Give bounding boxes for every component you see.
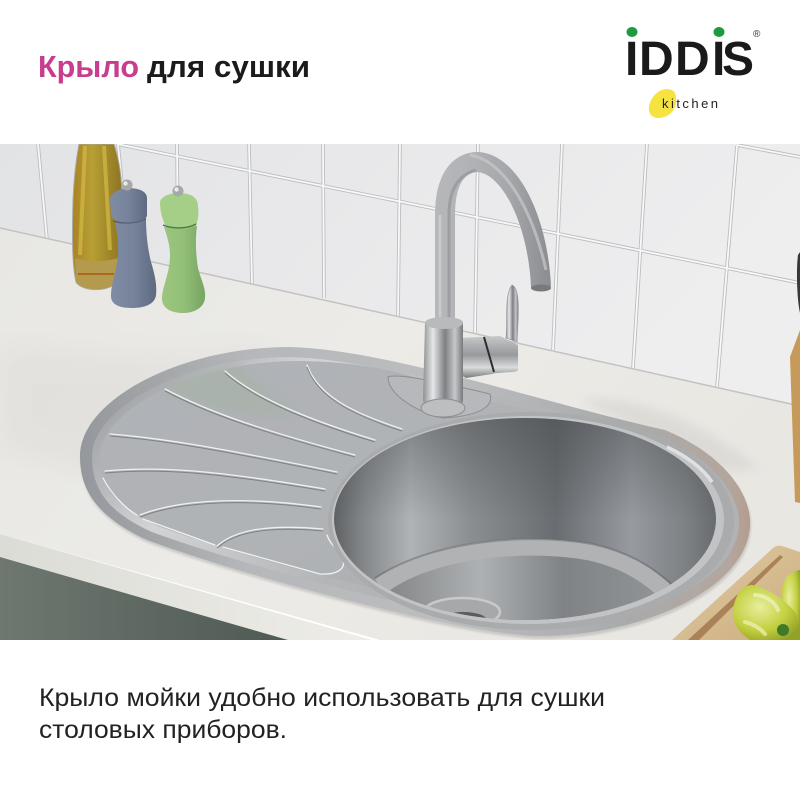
cutting board with peppers [672,546,800,640]
sink [80,347,752,640]
logo: IDDIS kitchen [625,27,761,118]
body text [39,684,605,744]
bowl [328,412,724,630]
yellow blob [649,89,676,118]
tiled wall [0,144,800,414]
logo wordmark: IDDIS [625,33,754,86]
cabinet below counter [0,557,288,640]
blue pepper mill [110,180,156,308]
bowl rim ring [328,412,734,630]
wooden block at right edge [790,252,800,503]
countertop [0,228,800,640]
title [38,49,310,84]
counter front edge [0,534,372,640]
drainboard [108,361,446,570]
kitchen label: kitchen [662,96,718,111]
tap ledge [388,376,491,418]
green pepper mill [160,186,205,313]
pepper right [782,570,800,640]
logo green dots [626,27,724,37]
faucet handle [463,336,518,378]
title: Крыло [38,49,139,84]
title: для сушки [147,49,310,84]
bowl floor [390,556,654,620]
body text: Крыло мойки удобно использовать для сушки [39,684,605,712]
drainboard reflection [178,366,280,412]
registered mark: ® [753,29,761,40]
faucet base [423,317,463,409]
faucet lever [506,285,518,342]
bowl wall [334,418,716,620]
photo: kitchen sink [0,144,800,640]
bowl step ridge [380,547,672,598]
shadow of faucet on counter [596,401,748,468]
sink inner rim highlight [92,357,739,588]
sink shadow [82,476,752,640]
faucet [421,155,551,417]
drain [426,596,502,619]
faucet neck and spout [445,162,541,330]
bottle of oil [72,144,122,290]
body text: столовых приборов. [39,716,287,744]
pepper left [733,585,800,640]
sink outer rim [80,347,750,636]
drainboard grooves [103,365,402,574]
